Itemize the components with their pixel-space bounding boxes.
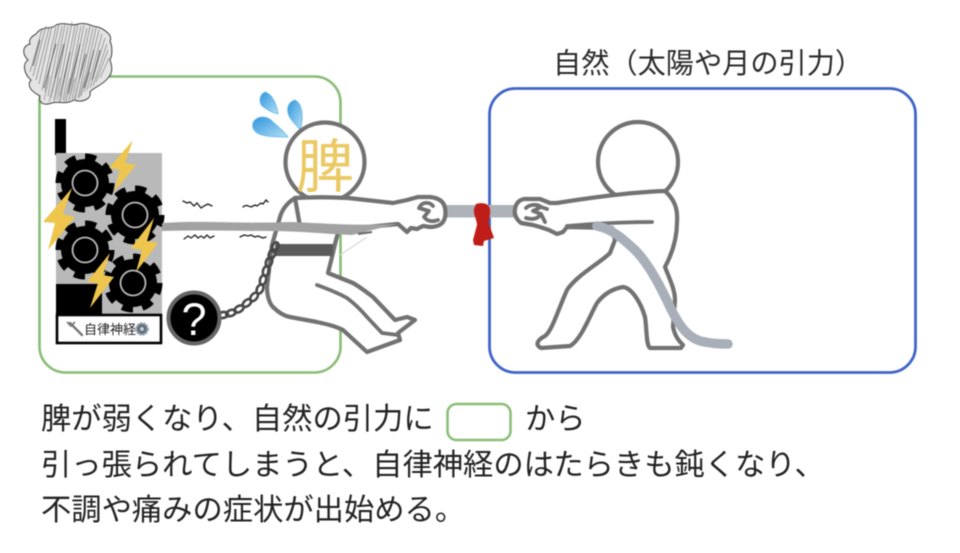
figure: right person pulling bbox=[515, 122, 728, 348]
head kanji: 脾 bbox=[296, 135, 354, 200]
panel: autonomic nerve machine bbox=[43, 119, 162, 343]
left rope bbox=[162, 222, 397, 235]
wavy strain marks bbox=[183, 200, 268, 239]
blank answer box bbox=[448, 404, 510, 440]
icon: scribbled dark cloud bbox=[24, 22, 112, 104]
head bbox=[598, 122, 678, 202]
faint rope shadow line bbox=[340, 237, 367, 255]
panel: blue box (nature) bbox=[490, 88, 916, 372]
gear 4 bbox=[107, 257, 159, 309]
gear 3 bbox=[59, 224, 111, 276]
lightning bolt 2 bbox=[43, 188, 75, 250]
title: nature heading: 自然（太陽や月の引力） bbox=[553, 47, 863, 79]
lightning bolt 1 bbox=[109, 140, 136, 192]
icon: ball and chain with question mark: ? bbox=[181, 294, 207, 345]
torso and legs bbox=[267, 198, 415, 352]
figure: left person with head kanji bbox=[162, 92, 446, 352]
arm and fist bbox=[295, 197, 446, 232]
machine body bbox=[56, 153, 162, 315]
line 1: 脾が弱くなり、自然の引力に bbox=[41, 402, 434, 436]
line 1 end: から bbox=[525, 403, 586, 436]
gear 1 bbox=[59, 157, 111, 209]
rope over shoulder bbox=[620, 185, 667, 192]
body bbox=[515, 191, 683, 348]
line 3: 不調や痛みの症状が出始める。 bbox=[41, 493, 465, 527]
lightning bolt 4 bbox=[87, 253, 114, 308]
machine label: 自律神経 bbox=[84, 322, 136, 337]
gear 2 bbox=[109, 189, 161, 241]
leg crease bbox=[317, 285, 398, 335]
center rope bbox=[443, 205, 517, 218]
line 2: 引っ張られてしまうと、自律神経のはたらきも鈍くなり、 bbox=[41, 448, 825, 482]
black base block bbox=[56, 284, 102, 315]
icon: ball and chain with question mark bbox=[168, 241, 280, 345]
rope shadow bbox=[358, 232, 372, 234]
chimney bbox=[55, 119, 66, 155]
panel: green box (body) bbox=[40, 76, 340, 372]
lightning bolt 3 bbox=[131, 218, 158, 272]
machine label bbox=[57, 315, 161, 343]
text block: explanation bbox=[41, 402, 825, 527]
waist belt bbox=[275, 244, 333, 256]
icon: red knot bbox=[473, 203, 494, 246]
head bbox=[286, 122, 364, 202]
icon: sweat drops bbox=[253, 92, 302, 137]
trailing rope bbox=[597, 226, 728, 344]
